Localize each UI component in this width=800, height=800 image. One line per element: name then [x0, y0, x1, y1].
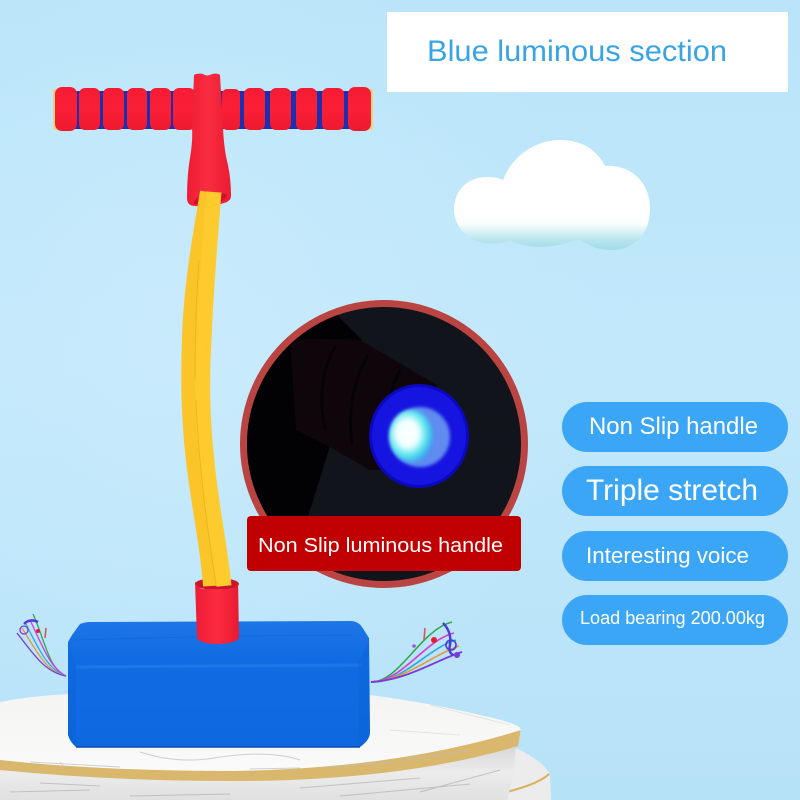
red caption label	[247, 516, 521, 571]
pill: load bearing	[562, 595, 788, 645]
dark photo	[247, 307, 521, 581]
foam grips	[55, 87, 371, 131]
pill: non slip handle	[562, 402, 788, 452]
surface texture	[30, 705, 510, 769]
ring	[240, 300, 528, 588]
marble platform	[0, 692, 551, 800]
lower tier	[470, 740, 551, 800]
pill: interesting voice	[562, 531, 788, 581]
title box	[387, 12, 788, 92]
marble veins	[10, 770, 500, 796]
red T connector	[187, 74, 231, 207]
blue foam block	[68, 621, 370, 747]
caption text: Non Slip luminous handle	[258, 535, 503, 557]
title text: Blue luminous section	[427, 35, 727, 68]
pill: non slip handle: Non Slip handle	[589, 413, 758, 440]
dark handle	[290, 338, 437, 470]
glow core	[389, 410, 433, 462]
pill: triple stretch: Triple stretch	[586, 474, 758, 507]
cylinder side	[0, 745, 516, 800]
circular detail lens	[240, 300, 530, 600]
cloud	[454, 140, 650, 250]
red base sleeve	[195, 580, 239, 644]
blue core	[60, 91, 366, 129]
red handle bar	[53, 87, 373, 131]
music notes left	[17, 614, 66, 676]
music notes right	[371, 622, 462, 682]
pill: triple stretch	[562, 466, 788, 516]
gold rim	[0, 728, 521, 781]
top surface	[0, 692, 521, 771]
base sleeve back rim	[195, 578, 239, 590]
pill: interesting voice: Interesting voice	[586, 543, 749, 568]
blue light	[369, 384, 469, 488]
pill: load bearing: Load bearing 200.00kg	[580, 608, 765, 628]
end caps	[53, 89, 59, 130]
yellow spring pole	[189, 192, 224, 586]
